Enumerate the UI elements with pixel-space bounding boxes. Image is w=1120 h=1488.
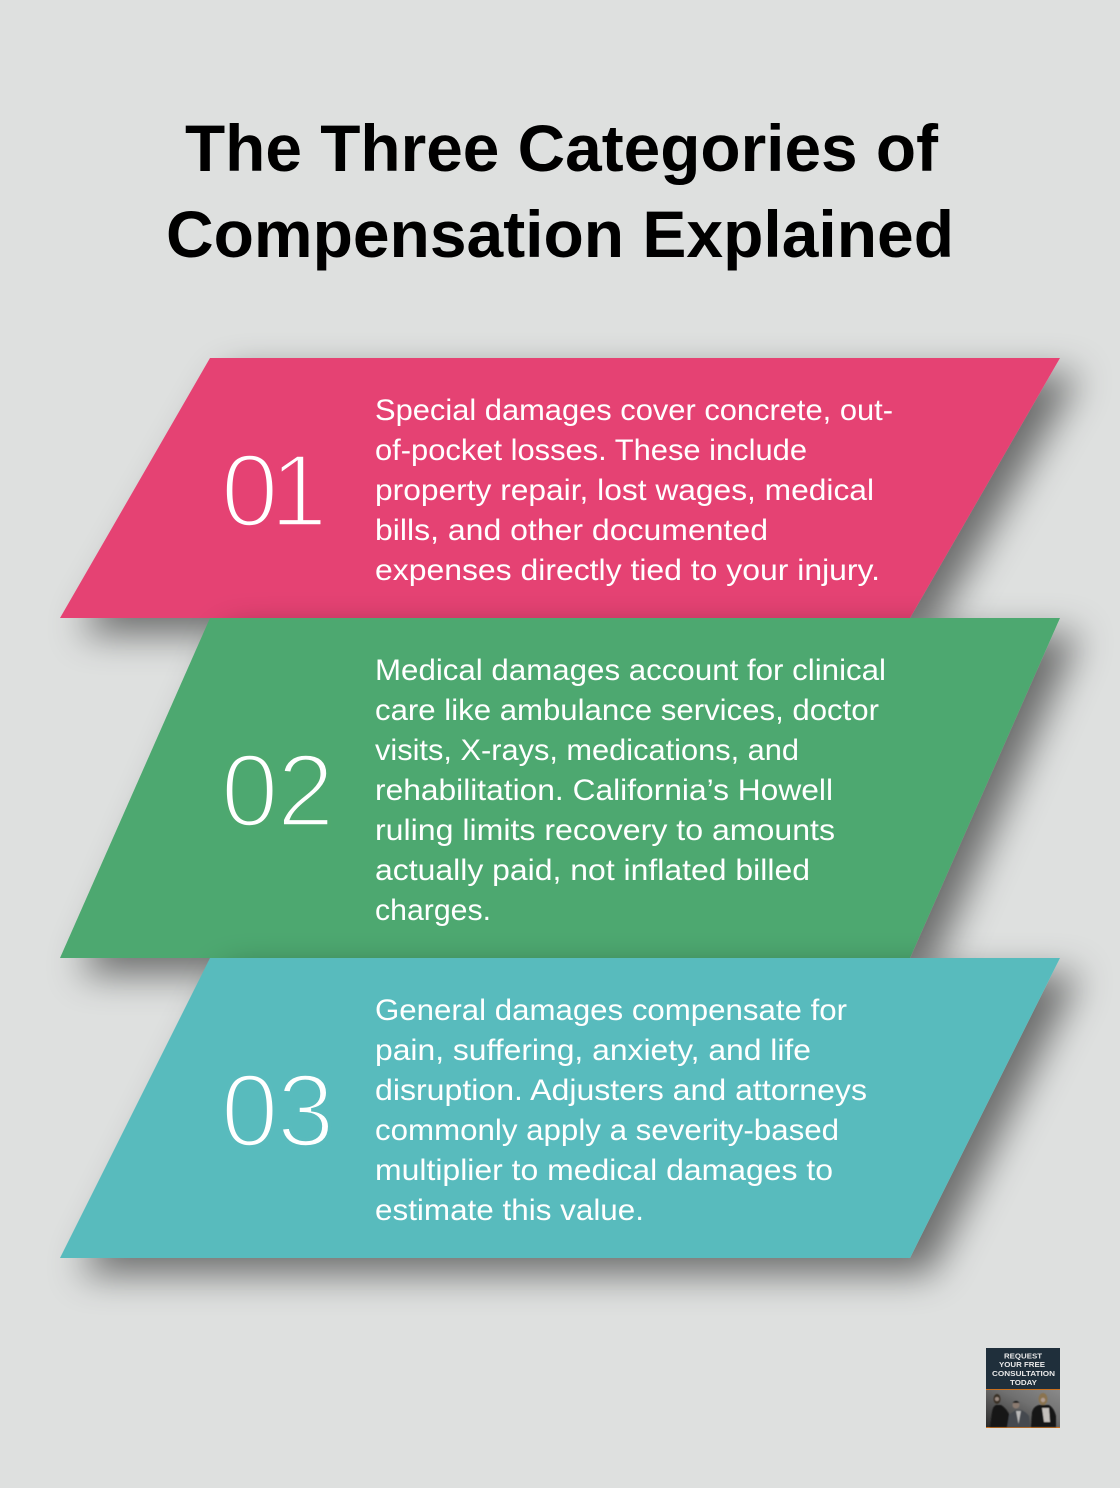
text block: general damages: disruption. Adjusters and attorneys — [375, 1074, 867, 1107]
text block: medical damages: actually paid, not inflated billed — [375, 854, 810, 887]
text block: general damages: estimate this value. — [375, 1194, 644, 1227]
text block: special damages: of-pocket losses. These include — [375, 434, 807, 467]
text block: medical damages: visits, X-rays, medications, and — [375, 734, 799, 767]
text block: special damages: bills, and other documented — [375, 514, 768, 547]
text block: general damages: pain, suffering, anxiety, and life — [375, 1034, 811, 1067]
number 03: 03 — [221, 1053, 334, 1168]
text block: medical damages: care like ambulance services, doctor — [375, 694, 879, 727]
badge text: TODAY — [1010, 1378, 1037, 1387]
panel: general damages — [60, 958, 1060, 1258]
text block: medical damages: ruling limits recovery to amounts — [375, 814, 835, 847]
panel: medical damages — [60, 618, 1060, 958]
text block: general damages: General damages compensate for — [375, 994, 847, 1027]
badge text: CONSULTATION — [992, 1369, 1055, 1378]
title — [166, 111, 954, 271]
text block: special damages: property repair, lost wages, medical — [375, 474, 874, 507]
text block: special damages — [375, 394, 893, 587]
text block: general damages — [375, 994, 867, 1227]
parallelogram: pink — [60, 358, 1060, 618]
logo badge: request your free consultation — [986, 1348, 1060, 1428]
text block: medical damages: charges. — [375, 894, 491, 927]
text block: medical damages — [375, 654, 886, 927]
badge text: YOUR FREE — [999, 1360, 1045, 1369]
badge photo: three people — [990, 1393, 1056, 1427]
text block: special damages: expenses directly tied to your injury. — [375, 554, 880, 587]
text block: general damages: commonly apply a severity-based — [375, 1114, 839, 1147]
text block: general damages: multiplier to medical damages to — [375, 1154, 833, 1187]
title: The Three Categories of — [185, 111, 939, 185]
panel: special damages — [60, 358, 1060, 618]
text block: special damages: Special damages cover concrete, out- — [375, 394, 893, 427]
number 01: 01 — [221, 433, 327, 548]
text block: medical damages: Medical damages account for clinical — [375, 654, 886, 687]
badge text — [992, 1352, 1055, 1387]
badge text: REQUEST — [1004, 1352, 1042, 1360]
parallelogram: teal — [60, 958, 1060, 1258]
number 02: 02 — [221, 733, 334, 848]
text block: medical damages: rehabilitation. California’s Howell — [375, 774, 833, 807]
parallelogram: green — [60, 618, 1060, 958]
title: Compensation Explained — [166, 197, 954, 271]
